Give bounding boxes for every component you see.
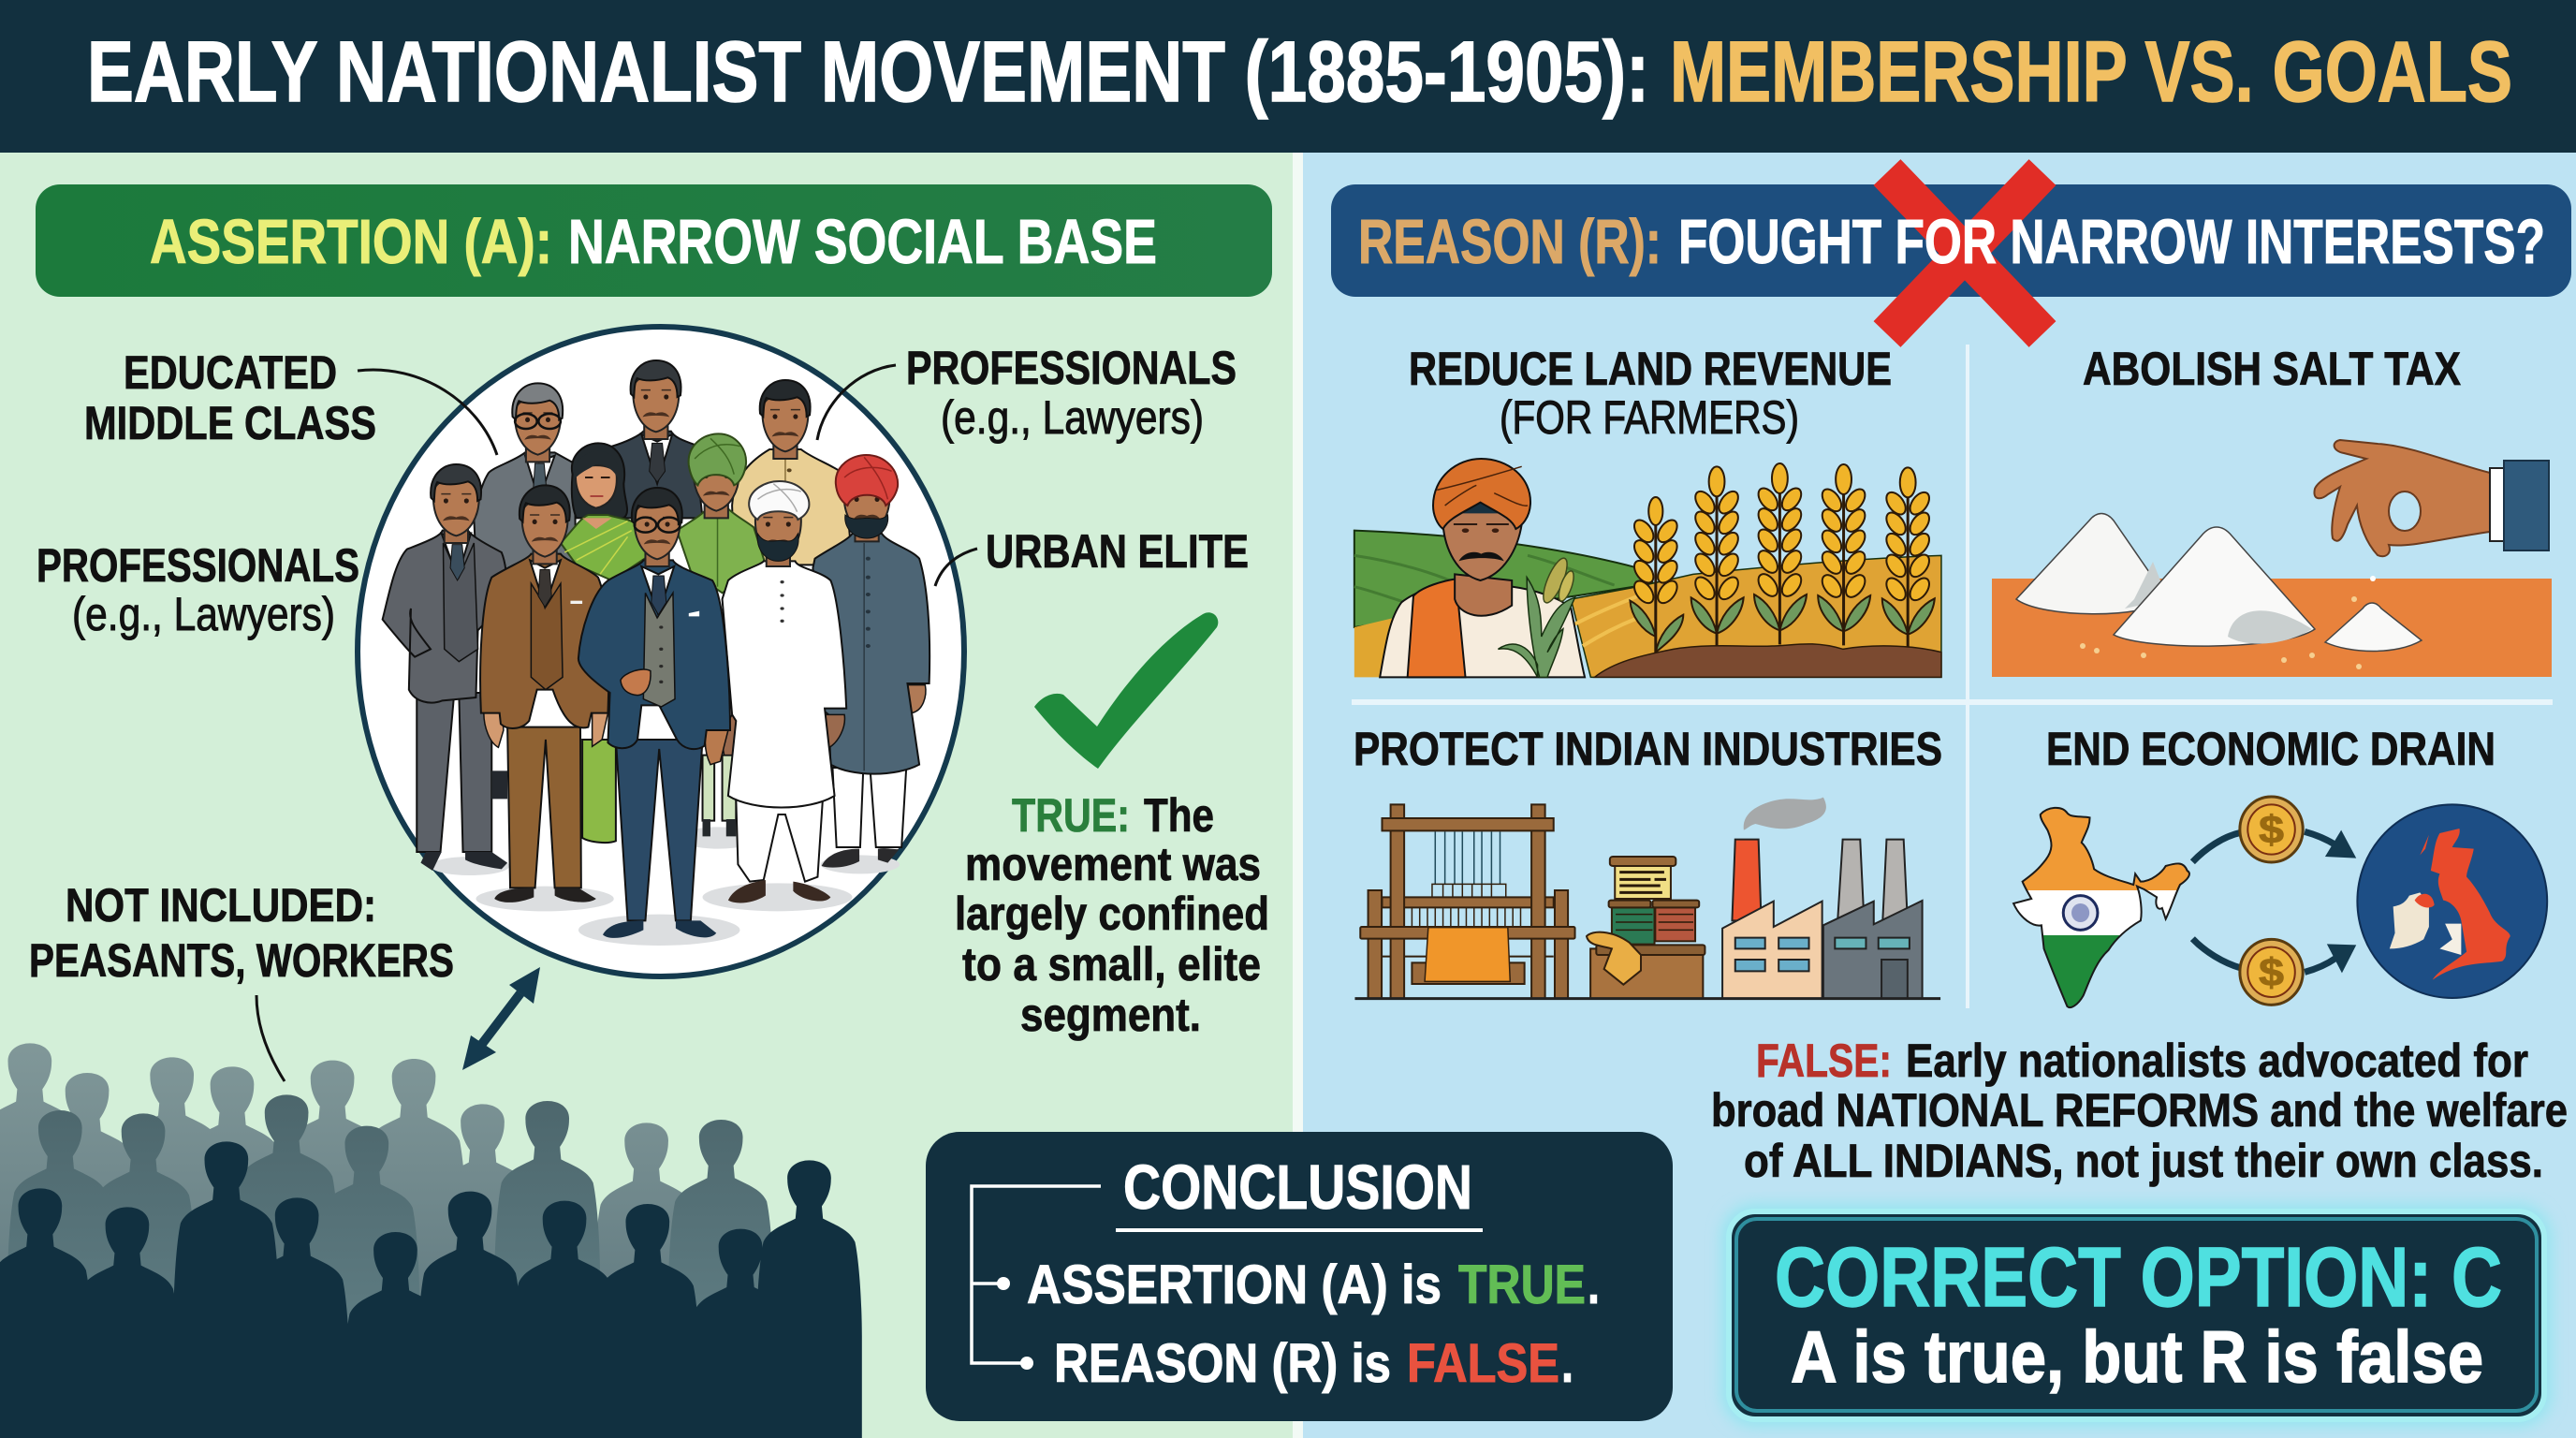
text: false explanation [1711, 1034, 2568, 1187]
heading: abolish salt tax: ABOLISH SALT TAX [2083, 343, 2461, 395]
text: true explanation: to a small, elite [962, 938, 1261, 990]
panel: correct option: A is true, but R is false [1791, 1315, 2483, 1398]
icon: coin bottom: $ [2259, 950, 2284, 994]
label: educated middle class: MIDDLE CLASS [84, 397, 376, 449]
label: urban elite: URBAN ELITE [986, 525, 1249, 578]
heading: reduce land revenue: REDUCE LAND REVENUE [1409, 343, 1892, 395]
illustration: economic drain from India to Britain [2013, 797, 2547, 1007]
panel: conclusion: ASSERTION (A) is [1027, 1255, 1442, 1315]
assertion heading bar: ASSERTION (A): [150, 207, 552, 277]
label: not included: PEASANTS, WORKERS [29, 934, 454, 987]
panel: conclusion: CONCLUSION [1123, 1152, 1472, 1223]
panel: conclusion: TRUE [1458, 1255, 1586, 1315]
title banner [0, 0, 2576, 153]
icon: coin top [2240, 797, 2303, 862]
panel: conclusion: . [1588, 1255, 1600, 1315]
icon: smoke [1744, 798, 1826, 830]
heading: reduce land revenue: (FOR FARMERS) [1500, 391, 1799, 444]
illustration: crowd of silhouettes [0, 1043, 862, 1438]
heading: reduce land revenue [1409, 343, 1892, 444]
panel: conclusion: REASON (R) is [1054, 1333, 1391, 1394]
text: true explanation: largely confined [955, 888, 1269, 940]
label: not included [29, 879, 454, 1081]
person: left man in grey suit [383, 464, 507, 871]
icon: coin bottom [2240, 939, 2303, 1005]
title banner: EARLY NATIONALIST MOVEMENT (1885-1905): [87, 24, 1649, 120]
icon: coin top: $ [2259, 808, 2284, 852]
text: false explanation: FALSE: [1756, 1034, 1892, 1087]
panel: correct option [1729, 1211, 2544, 1419]
person: grey-haired man with glasses [474, 383, 577, 599]
person: tall man in dark suit [612, 360, 703, 518]
assertion heading bar [36, 184, 1272, 297]
person: man in white kurta and white turban [723, 481, 846, 902]
assertion heading bar: NARROW SOCIAL BASE [568, 207, 1157, 277]
person: man in brown suit [480, 485, 608, 902]
label: professionals right: (e.g., Lawyers) [941, 391, 1204, 444]
text: true explanation: The [1144, 789, 1214, 842]
label: educated middle class [84, 346, 497, 455]
arrow: double-headed gap arrow [462, 967, 540, 1070]
person: man in cream kurta [732, 380, 853, 565]
illustration: farmer and wheat [1354, 459, 1941, 677]
text: true explanation: movement was [965, 838, 1261, 890]
person: woman in green sari [561, 443, 650, 843]
reason heading bar with red cross [1331, 172, 2571, 334]
person: man in red turban and dark coat [812, 455, 929, 868]
elite group circle illustration [358, 327, 964, 976]
person: front man in navy suit with glasses [578, 488, 730, 938]
panel: reason background [1303, 153, 2576, 1438]
label: professionals left: PROFESSIONALS [37, 539, 359, 592]
heading: protect indian industries: PROTECT INDIAN INDUSTRIES [1354, 723, 1942, 775]
label: not included: NOT INCLUDED: [66, 879, 376, 932]
label: professionals left: (e.g., Lawyers) [72, 588, 335, 640]
icon: green check mark [1034, 612, 1218, 769]
text: true explanation [955, 789, 1269, 1041]
panel: conclusion: . [1561, 1333, 1573, 1394]
illustration: salt piles and hand [1992, 440, 2552, 677]
text: true explanation: TRUE: [1012, 789, 1130, 842]
text: true explanation: segment. [1020, 989, 1201, 1041]
heading: end economic drain: END ECONOMIC DRAIN [2046, 723, 2496, 775]
label: professionals right [817, 342, 1237, 444]
label: educated middle class: EDUCATED [124, 346, 337, 399]
label: urban elite [935, 525, 1249, 586]
label: professionals left [37, 539, 359, 640]
panel: conclusion [926, 1132, 1673, 1421]
illustration: loom, goods and factories [1354, 798, 1940, 999]
icon: British Isles globe [2357, 804, 2547, 998]
label: professionals right: PROFESSIONALS [906, 342, 1237, 394]
panel: assertion background [0, 153, 1293, 1438]
reason heading bar with red cross: REASON (R): [1358, 207, 1661, 277]
icon: India map [2013, 808, 2189, 1007]
person: man with green turban [677, 433, 766, 836]
panel: conclusion: FALSE [1407, 1333, 1559, 1394]
